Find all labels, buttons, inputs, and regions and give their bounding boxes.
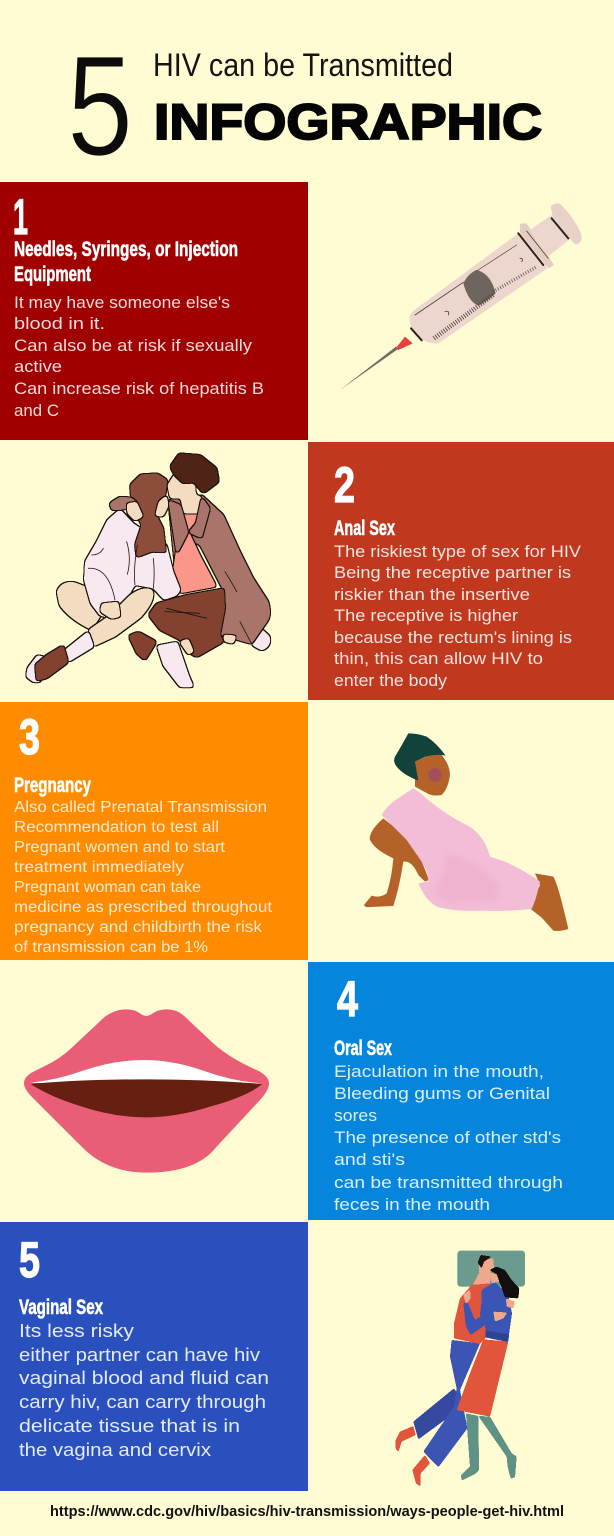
heading: Anal Sex [334, 517, 395, 540]
body text: vaginal blood and fluid can [19, 1367, 269, 1388]
green leg [461, 1413, 479, 1481]
man's hand on her back [506, 1298, 515, 1308]
panel 5: vaginal sex [0, 1222, 308, 1491]
number 2: 2 [334, 457, 355, 513]
front sock [412, 1455, 430, 1487]
hair [394, 733, 446, 781]
body text: active [14, 358, 62, 376]
panel background [308, 962, 614, 1220]
back trouser leg [413, 1388, 462, 1439]
dress [382, 788, 540, 911]
body text: Recommendation to test all [14, 819, 219, 836]
woman's shoe [35, 645, 68, 681]
pillow [457, 1251, 525, 1287]
body text [334, 543, 581, 690]
body text [14, 799, 273, 956]
number 5: 5 [19, 1232, 40, 1288]
man's face [479, 1258, 494, 1275]
panel 2: anal sex [308, 442, 614, 700]
body text: enter the body [334, 672, 448, 690]
man's trousers [148, 588, 225, 657]
body text [14, 294, 264, 420]
barrel [409, 233, 547, 343]
man's hair [478, 1255, 492, 1268]
mouth interior [31, 1079, 262, 1117]
body text: because the rectum's lining is [334, 629, 572, 647]
heading: Equipment [14, 263, 91, 286]
title line: HIV can be Transmitted: HIV can be Transmitted [153, 47, 453, 83]
plug [463, 270, 496, 306]
body text: The presence of other std's [334, 1129, 561, 1147]
leg [530, 873, 568, 931]
number 1: 1 [13, 189, 28, 245]
woman's face [490, 1273, 499, 1283]
woman's shoe rim [26, 655, 50, 682]
panel background [0, 702, 308, 960]
woman's far shoe [128, 632, 157, 661]
woman's body [480, 1282, 512, 1342]
heading: Needles, Syringes, or Injection [14, 238, 238, 261]
body text: carry hiv, can carry through [19, 1391, 266, 1412]
teeth [31, 1060, 262, 1087]
body text: sores [334, 1107, 377, 1125]
dress shading [433, 853, 500, 903]
heading: Vaginal Sex [19, 1296, 103, 1319]
title [67, 27, 542, 186]
arms [364, 818, 429, 907]
body text: Can also be at risk if sexually [14, 337, 253, 355]
body text: feces in the mouth [334, 1196, 490, 1214]
needle [340, 347, 398, 390]
body text [334, 1063, 563, 1214]
sock [63, 631, 94, 662]
man's shirt [173, 513, 217, 593]
man's face and neck [167, 473, 202, 513]
icon: couple kissing [26, 453, 270, 687]
woman's hand on chest [493, 1312, 507, 1322]
title line: INFOGRAPHIC: INFOGRAPHIC [154, 94, 542, 150]
woman's near leg [57, 582, 103, 630]
body text: of transmission can be 1% [14, 939, 208, 956]
man's coat [168, 495, 270, 644]
woman's other hand [463, 1289, 471, 1304]
heading: Pregnancy [14, 774, 91, 797]
man's sweater [454, 1283, 495, 1344]
man's ankle [179, 638, 194, 655]
body text: Being the receptive partner is [334, 564, 571, 582]
panel 1: needles, syringes [0, 182, 308, 440]
dress [457, 1339, 508, 1417]
woman's arm [463, 1302, 497, 1335]
body text: thin, this can allow HIV to [334, 650, 543, 668]
panel 4: oral sex [308, 962, 614, 1220]
barrel markings [411, 218, 568, 340]
woman's hair [130, 473, 167, 557]
cheek [428, 768, 442, 782]
body text: delicate tissue that is in [19, 1415, 240, 1436]
body text: Ejaculation in the mouth, [334, 1063, 544, 1081]
number 4: 4 [337, 971, 358, 1027]
icon: couple lying down [396, 1251, 525, 1487]
body text: Its less risky [19, 1320, 135, 1341]
body text [19, 1320, 269, 1460]
red hub [396, 337, 413, 350]
woman's face [155, 495, 169, 517]
big numeral 5: 5 [67, 27, 133, 186]
man's hair [170, 453, 219, 493]
icon: lips [24, 1009, 269, 1173]
panel background [308, 442, 614, 700]
plunger head [551, 203, 582, 244]
body text: Pregnant woman can take [14, 879, 201, 896]
second green leg [478, 1416, 517, 1479]
icon: syringe [340, 203, 582, 390]
body text: the vagina and cervix [19, 1439, 212, 1460]
panel background [0, 182, 308, 440]
head [415, 755, 450, 796]
coat collar right [188, 497, 210, 538]
body text: It may have someone else's [14, 294, 230, 312]
back sock [396, 1426, 416, 1452]
number 3: 3 [19, 709, 40, 765]
heading: Oral Sex [334, 1037, 392, 1060]
panel 3: pregnancy [0, 702, 308, 960]
coat collar left [168, 500, 188, 555]
source url footer: https://www.cdc.gov/hiv/basics/hiv-transmission/ways-people-get-hiv.html [50, 1504, 564, 1520]
man's near shoe [157, 642, 194, 687]
heading [14, 238, 238, 286]
body text: The receptive is higher [334, 607, 519, 625]
man's far shoe [252, 626, 270, 651]
body text: blood in it. [14, 315, 105, 333]
man's neck [473, 1272, 491, 1285]
sweater hem [485, 1331, 509, 1342]
body text: and sti's [334, 1151, 405, 1169]
man's arm [109, 497, 138, 510]
crossing leg [88, 588, 153, 647]
body text: Also called Prenatal Transmission [14, 799, 267, 816]
body text: Pregnant women and to start [14, 839, 226, 856]
body text: medicine as prescribed throughout [14, 899, 273, 916]
woman's hair [489, 1267, 519, 1298]
body text: The riskiest type of sex for HIV [334, 543, 581, 561]
man's hand on shoulder [127, 502, 143, 521]
body text: pregnancy and childbirth the risk [14, 919, 262, 936]
plunger shaft [530, 215, 571, 258]
garment fold lines [88, 542, 252, 644]
hoodie [84, 509, 181, 620]
body text: Bleeding gums or Genital [334, 1085, 550, 1103]
body text: riskier than the insertive [334, 586, 530, 604]
body text: either partner can have hiv [19, 1344, 261, 1365]
panel background [0, 1222, 308, 1491]
outer lips [24, 1009, 269, 1173]
body text: treatment immediately [14, 859, 184, 876]
body text: and C [14, 402, 59, 420]
body text: can be transmitted through [334, 1174, 563, 1192]
flange collar [520, 223, 554, 268]
man's hand [223, 634, 237, 644]
woman's hand [100, 602, 121, 619]
body text: Can increase risk of hepatitis B [14, 380, 264, 398]
icon: pregnant woman [364, 733, 568, 931]
front trousers [423, 1340, 480, 1467]
